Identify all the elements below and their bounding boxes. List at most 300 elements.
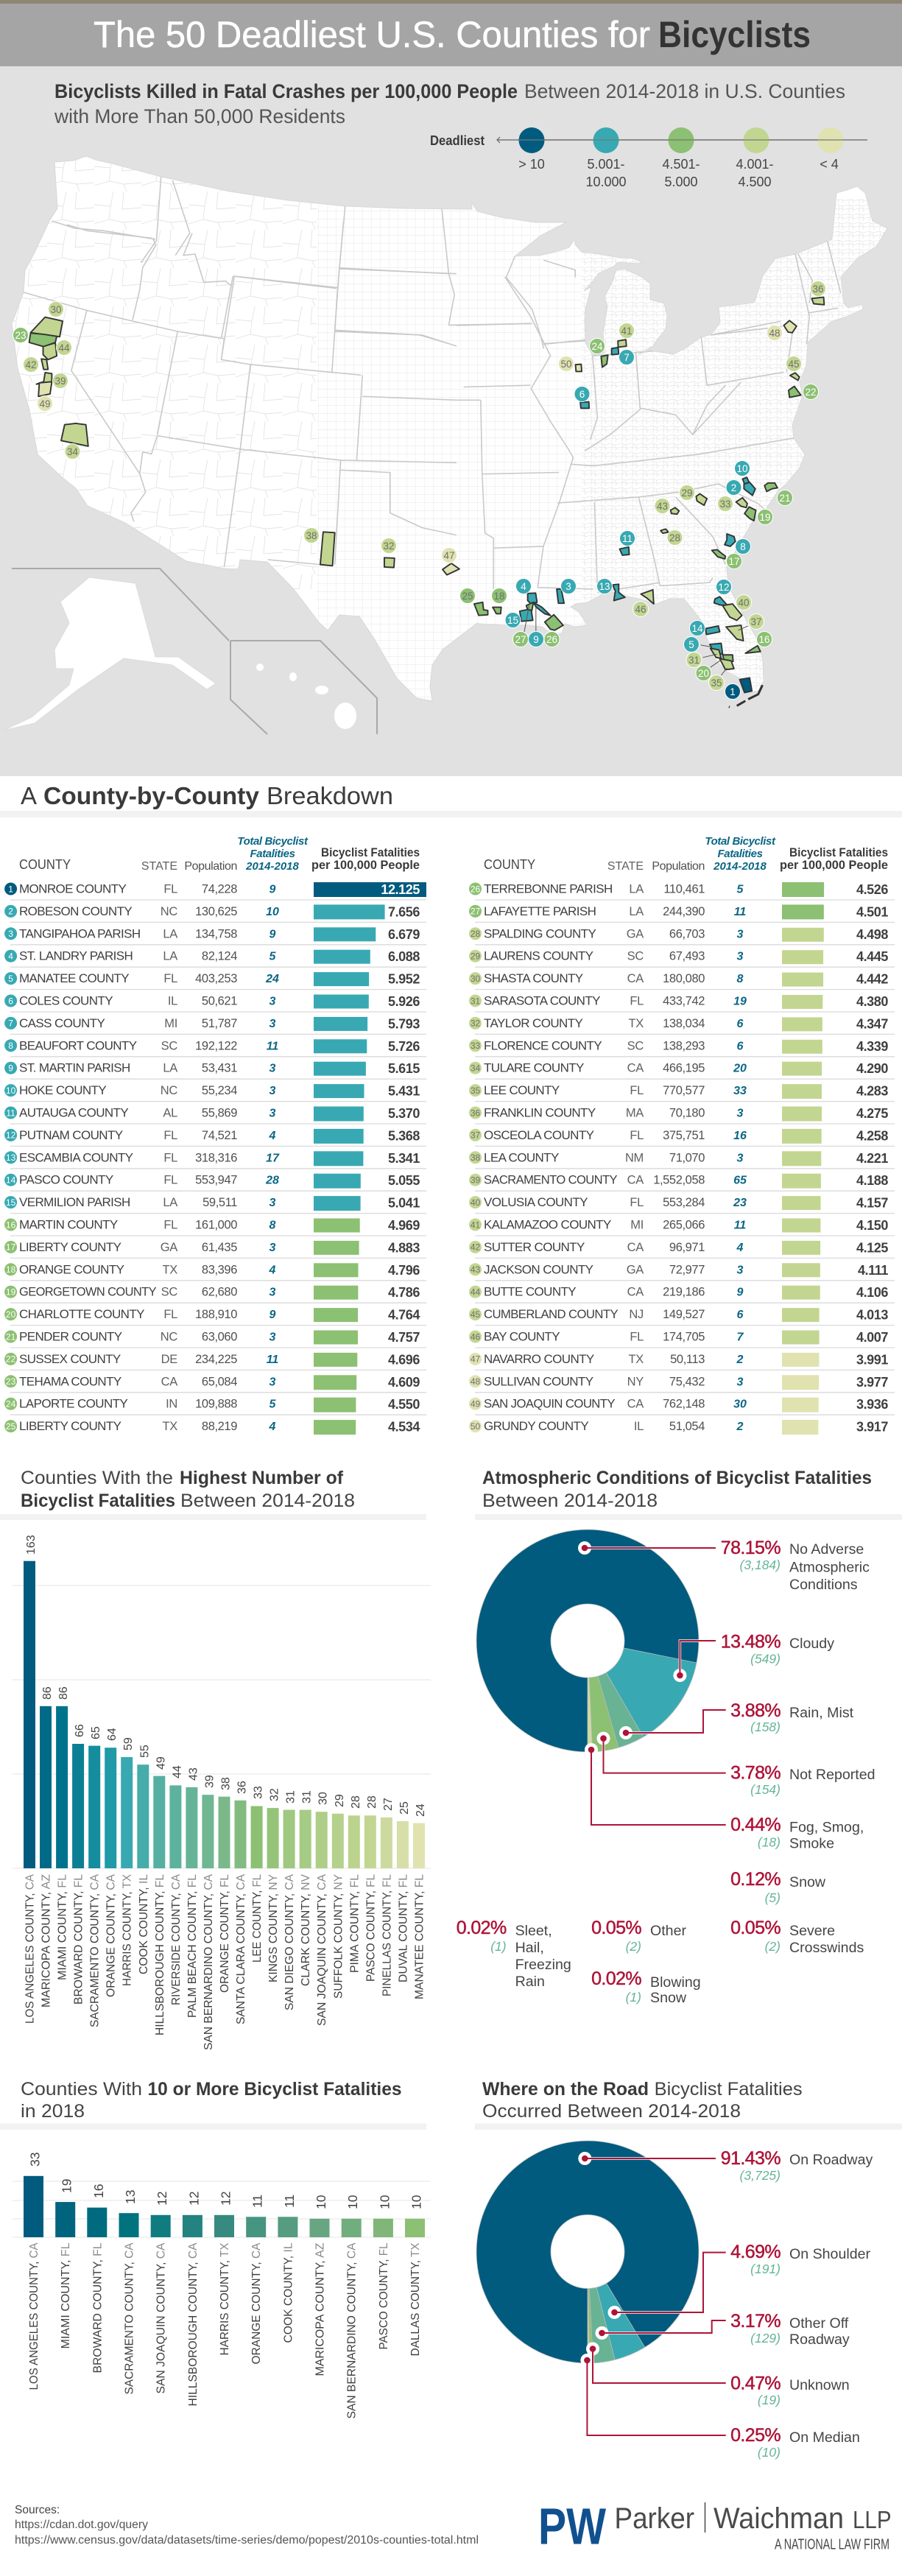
row 24: LAPORTE COUNTY [19,1397,127,1411]
labels: atmospheric conditions: (1) [490,1939,507,1954]
row 42: SUTTER COUNTY [484,1240,585,1254]
row 13: 318,316 [195,1151,237,1164]
row 4: 5 [269,951,277,963]
row 17 [4,1240,426,1258]
row 6: IL [168,994,177,1007]
row 42: 4 [736,1242,744,1254]
row 28: GA [627,927,644,940]
table header right: Total Bicyclist [705,835,776,848]
row 35: FL [630,1084,644,1097]
heading: where on the road: Occurred Between 2014-2018 [482,2101,741,2122]
row 11: 55,869 [202,1106,237,1119]
row 16: 4.969 [388,1218,420,1233]
map legend: 4.001- [736,157,774,172]
labels: atmospheric conditions: (5) [765,1890,781,1905]
map marker numbers: 30 [50,304,62,315]
row 34: CA [627,1062,644,1075]
row 33: 138,293 [663,1039,705,1052]
heading: where on the road: Where on the Road [482,2079,649,2100]
row 8: 192,122 [195,1039,237,1052]
row 7: 3 [269,1018,276,1030]
row 47: 50,113 [670,1353,705,1366]
heading: 10 or more fatalities: Counties With [21,2079,142,2100]
heading: highest number: Between 2014-2018 [180,1491,355,1511]
bar values: 38 [219,1777,233,1790]
row 15: 3 [269,1197,276,1209]
row 47: 2 [736,1354,744,1366]
row 24: 5 [269,1398,277,1411]
row 17: 4.883 [388,1240,420,1255]
row 41: 4.150 [856,1218,888,1233]
row 33: FLORENCE COUNTY [484,1038,602,1052]
row 45: 6 [737,1309,744,1321]
bar labels: SAN BERNARDINO COUNTY, CA [202,1874,215,2050]
row 16: 161,000 [195,1218,237,1231]
labels: atmospheric conditions: Fog, Smog, [789,1820,864,1836]
row 2: 7.656 [388,904,420,919]
row 15: VERMILION PARISH [19,1195,130,1209]
heading: 10 or more fatalities: 10 or More Bicyclist Fatalities [147,2079,402,2100]
row 6 [4,994,426,1012]
row 18 [4,1262,426,1281]
labels: atmospheric conditions: Other [650,1923,686,1939]
labels: where on the road: (129) [750,2331,781,2346]
row 41: MI [630,1218,644,1231]
bar values: 32 [269,1788,281,1801]
bar values 2018: 11 [282,2195,297,2208]
table header right [484,835,888,873]
bar labels: BROWARD COUNTY, FL [73,1874,85,2005]
panel: highest number of fatalities [0,1468,431,2050]
row 23: TEHAMA COUNTY [19,1374,121,1388]
map marker numbers: 37 [750,616,762,627]
row 40: FL [630,1196,644,1209]
row 20: FL [163,1308,177,1321]
table header right: COUNTY [484,857,535,872]
row 28: 66,703 [669,927,705,940]
row 50: GRUNDY COUNTY [484,1419,588,1433]
row 14: PASCO COUNTY [19,1173,113,1187]
row 48 [469,1374,895,1393]
map marker numbers: 22 [805,387,817,398]
row 3: 134,758 [195,927,237,940]
row 47: TX [629,1353,644,1366]
row 2: NC [161,905,177,918]
labels: atmospheric conditions [457,1538,875,2006]
row 44: 219,186 [663,1286,705,1299]
sources: Sources: [15,2504,60,2516]
map marker numbers: 8 [740,541,746,552]
table header left: Bicyclist Fatalities [321,845,420,859]
header band [0,0,902,66]
row 6: COLES COUNTY [19,994,113,1007]
row 37: 37 [471,1130,480,1141]
row 17: 17 [6,1242,16,1253]
map marker numbers: 38 [306,530,317,541]
row 5 [4,971,426,990]
row 13: 5.341 [388,1151,420,1166]
row 17: GA [161,1241,177,1254]
row 45: 45 [471,1309,480,1320]
row 35 [469,1083,895,1102]
bar labels 2018: BROWARD COUNTY, FL [91,2242,104,2373]
row 30: SHASTA COUNTY [484,971,583,985]
row 22: 11 [267,1354,278,1366]
row 15: 15 [6,1197,16,1208]
labels: where on the road: On Median [789,2429,860,2446]
map legend: 4.500 [738,175,772,189]
table header left: Population [184,860,237,873]
row 1: 12.125 [381,882,420,897]
map marker numbers: 46 [635,604,646,615]
row 40: 40 [471,1197,480,1208]
map marker numbers: 29 [681,488,693,499]
row 6: 5.926 [388,994,420,1009]
row 6: 6 [8,996,13,1006]
row 8: 5.726 [388,1039,420,1054]
row 10: 55,234 [202,1084,237,1097]
row 26: 4.526 [856,882,888,897]
row 49: 30 [733,1398,747,1411]
bar labels: LOS ANGELES COUNTY, CA [24,1874,37,2024]
callout leaders: atmospheric [578,1541,726,1825]
map markers 1-50 [13,281,826,700]
row 32: TX [629,1017,644,1030]
row 15 [4,1195,426,1214]
row 5: FL [163,972,177,985]
row 23: 4.609 [388,1375,420,1390]
map subtitle: Bicyclists Killed in Fatal Crashes per 100,000 People [54,80,518,102]
bar labels: MARICOPA COUNTY, AZ [40,1874,53,2007]
map marker numbers: 35 [711,678,722,689]
map marker numbers: 36 [812,284,824,295]
bar labels: CLARK COUNTY, NV [300,1874,312,1986]
labels: where on the road: (10) [758,2445,781,2460]
row 7: 7 [8,1018,13,1029]
map marker numbers: 31 [688,655,700,666]
map marker numbers: 50 [560,359,572,370]
labels: where on the road: 4.69% [730,2242,781,2262]
bar values: 24 [415,1803,427,1817]
bar labels 2018: SAN JOAQUIN COUNTY, CA [155,2242,168,2393]
row 31: 433,742 [663,994,705,1007]
row 18: ORANGE COUNTY [19,1262,124,1276]
row 43: GA [627,1263,644,1276]
row 46: 4.007 [856,1330,888,1345]
row 7: CASS COUNTY [19,1016,105,1030]
row 21: 4.757 [388,1330,420,1345]
bar labels: ORANGE COUNTY, FL [219,1874,231,1993]
map of United States counties [0,147,902,734]
row 5: 403,253 [195,972,237,985]
bar labels: SACRAMENTO COUNTY, CA [89,1874,102,2027]
map legend: > 10 [518,157,545,172]
row 18: 18 [6,1264,16,1275]
map marker numbers: 2 [731,482,736,493]
bar chart: 2018 fatalities [24,2176,425,2237]
table header left [19,835,420,873]
sources: https://www.census.gov/data/datasets/time-series/demo/popest/2010s-counties-total.html [15,2534,479,2547]
bar labels [24,1874,426,2050]
row 25: 25 [6,1421,16,1432]
bar values 2018: 16 [91,2184,106,2198]
row 33: 33 [471,1041,480,1051]
labels: atmospheric conditions: No Adverse [789,1541,864,1558]
bar values: 25 [398,1801,411,1815]
row 3: 9 [269,928,276,940]
row 45: 4.013 [856,1308,888,1323]
row 24 [4,1397,426,1415]
labels: atmospheric conditions: Snow [650,1990,687,2006]
row 47: 47 [471,1354,480,1365]
row 31: 31 [471,996,480,1006]
row 29: LAURENS COUNTY [484,949,593,963]
row 34: TULARE COUNTY [484,1061,584,1075]
bar values: 28 [366,1795,378,1809]
row 43: 4.111 [858,1263,888,1278]
bar chart: fatalities 2014-2018 [24,1561,425,1868]
row 36: FRANKLIN COUNTY [484,1106,596,1119]
row 20: 9 [269,1309,276,1321]
row 27: LA [629,905,644,918]
sources: https://cdan.dot.gov/query [15,2519,148,2531]
row 23: CA [161,1375,177,1388]
row 24: 109,888 [195,1398,237,1411]
bar values: 31 [301,1790,314,1803]
row 46: 7 [737,1331,744,1343]
row 7: MI [164,1017,177,1030]
labels: where on the road: (191) [750,2262,781,2276]
row 9: LA [163,1062,177,1075]
row 9: ST. MARTIN PARISH [19,1061,130,1075]
labels: atmospheric conditions: 3.88% [730,1700,781,1721]
row 50: 3.917 [856,1420,888,1435]
logo: Parker Waichman LLP: Waichman [714,2502,844,2535]
bar values 2018: 10 [377,2195,392,2209]
row 11 [4,1106,426,1124]
callout leaders: road position [578,2152,726,2435]
row 19: SC [161,1286,177,1299]
labels: where on the road: Other Off [789,2315,849,2332]
row 10: HOKE COUNTY [19,1083,106,1097]
map marker numbers: 14 [691,623,703,634]
map marker numbers: 12 [718,582,730,593]
row 31: FL [630,994,644,1007]
map legend [430,127,867,189]
row 3: LA [163,927,177,940]
row 3: TANGIPAHOA PARISH [19,926,141,940]
labels: atmospheric conditions: (3,184) [740,1558,781,1572]
row 21: NC [161,1330,177,1343]
row 38: 71,070 [669,1151,705,1164]
labels: where on the road: 0.25% [730,2425,781,2446]
row 42: CA [627,1241,644,1254]
map marker numbers [15,284,824,697]
row 30: 180,080 [663,972,705,985]
map marker numbers: 27 [515,634,526,645]
map subtitle: Between 2014-2018 in U.S. Counties [524,80,845,102]
map marker numbers: 15 [507,615,518,626]
bar values: 30 [317,1792,330,1805]
row 25: 4.534 [388,1420,420,1435]
row 46: FL [630,1330,644,1343]
bar labels 2018: SACRAMENTO COUNTY, CA [124,2242,135,2395]
row 38: 4.221 [856,1151,888,1166]
row 42: 96,971 [669,1241,705,1254]
row 2: 2 [8,907,13,917]
row 14: FL [163,1174,177,1187]
row 38 [469,1150,895,1169]
bar labels: SUFFOLK COUNTY, NY [332,1874,345,1999]
row 37: OSCEOLA COUNTY [484,1128,594,1142]
row 10: 10 [6,1085,16,1096]
heading: highest number: Bicyclist Fatalities [21,1491,175,1511]
panel: 10 or more fatalities in 2018 [0,2079,431,2418]
row 32: 32 [471,1018,480,1029]
heading: highest number: Counties With the [21,1468,173,1488]
logo: Parker Waichman LLP [538,2498,891,2555]
bar values 2018: 19 [60,2179,74,2193]
map marker numbers: 7 [624,352,630,363]
labels: atmospheric conditions: 0.12% [730,1869,781,1890]
map marker numbers: 43 [657,501,668,512]
row 28: 3 [737,928,744,940]
bar labels: ORANGE COUNTY, CA [105,1874,118,1997]
row 25 [4,1419,420,1435]
row 43: JACKSON COUNTY [484,1262,593,1276]
row 33: 4.339 [856,1039,888,1054]
heading: atmospheric conditions [482,1468,872,1511]
labels: atmospheric conditions: (158) [750,1720,781,1734]
row 35: 33 [733,1085,747,1097]
bar labels: SAN DIEGO COUNTY, CA [283,1874,296,2010]
row 29: 3 [737,951,744,963]
row 45 [469,1307,895,1326]
row 35: 4.283 [856,1084,888,1099]
labels: where on the road: Unknown [789,2377,850,2393]
row 48: NY [627,1375,644,1388]
table header left: 2014-2018 [245,860,300,873]
heading: where on the road [482,2079,803,2122]
row 8: 8 [8,1041,13,1051]
row 30: CA [627,972,644,985]
row 40: VOLUSIA COUNTY [484,1195,588,1209]
bar values 2018: 10 [345,2195,360,2209]
row 14 [4,1173,426,1191]
row 12: 5.368 [388,1128,420,1143]
map marker numbers: 3 [565,581,571,592]
row 42: 4.125 [856,1240,888,1255]
table header left: STATE [141,860,177,873]
row 36: 36 [471,1108,480,1118]
row 31: SARASOTA COUNTY [484,994,600,1007]
bar labels: SAN JOAQUIN COUNTY, CA [316,1874,328,2026]
row 43: 3 [737,1264,744,1276]
row 36: 70,180 [669,1106,705,1119]
row 49: SAN JOAQUIN COUNTY [484,1397,615,1411]
row 26: 5 [737,884,744,895]
row 28: 4.498 [856,927,888,942]
row 36: MA [626,1106,644,1119]
map marker numbers: 40 [738,597,750,608]
row 47 [469,1352,895,1370]
row 48: 48 [471,1376,480,1387]
row 9 [4,1061,426,1079]
map marker numbers: 18 [493,591,505,602]
heading: county-by-county breakdown: County-by-County [43,782,260,809]
labels: atmospheric conditions: 0.02% [457,1918,507,1938]
table header right: per 100,000 People [780,858,888,872]
labels: atmospheric conditions: 0.05% [730,1918,781,1938]
row 31: 19 [733,996,747,1007]
row 23 [4,1374,426,1393]
row 32: 138,034 [663,1017,705,1030]
heading: atmospheric conditions: Between 2014-2018 [482,1491,658,1511]
bar values: 59 [122,1737,135,1750]
map marker numbers: 45 [788,359,800,370]
row 49: 762,148 [663,1398,705,1411]
row 28 [469,926,895,945]
labels: atmospheric conditions: 3.78% [730,1763,781,1784]
map legend: 5.000 [664,175,698,189]
row 26 [469,882,895,900]
row 50: 51,054 [669,1420,705,1433]
row 50: IL [634,1420,644,1433]
row 39 [469,1173,895,1191]
row 44 [469,1285,895,1303]
row 26: 26 [471,884,480,894]
map marker numbers: 33 [719,499,731,510]
row 22: DE [161,1353,177,1366]
panel: where on the road [475,2079,902,2460]
heading: atmospheric conditions: Atmospheric Conditions of Bicyclist Fatalities [482,1468,872,1488]
logo: Parker Waichman LLP: LLP [853,2506,891,2533]
row 20: CHARLOTTE COUNTY [19,1307,144,1321]
row 15: 59,511 [202,1196,237,1209]
row 22: SUSSEX COUNTY [19,1352,121,1366]
map marker numbers: 34 [67,446,78,457]
map legend: 10.000 [585,175,627,189]
row 19: 62,680 [202,1286,237,1299]
row 28: 28 [471,929,480,939]
row 34: 4.290 [856,1061,888,1076]
labels: atmospheric conditions: Conditions [789,1577,858,1593]
labels: atmospheric conditions: Atmospheric [789,1560,870,1576]
row 27: 11 [734,906,746,918]
row 11: 3 [269,1108,276,1119]
row 31: 4.380 [856,994,888,1009]
labels: atmospheric conditions: 78.15% [721,1538,781,1558]
row 17: 3 [269,1242,276,1254]
map marker numbers: 24 [591,341,603,352]
row 36 [469,1106,895,1124]
bar values: 33 [253,1786,265,1799]
row 5: 5.952 [388,972,420,987]
row 11: 11 [6,1108,15,1118]
row 27: 27 [471,907,480,917]
row 2: 10 [266,906,279,918]
labels: atmospheric conditions: Not Reported [789,1767,875,1783]
row 25: TX [163,1420,177,1433]
row 44: CA [627,1286,644,1299]
row 40: 553,284 [663,1196,705,1209]
heading: county-by-county breakdown: A [21,782,37,809]
row 34 [469,1061,895,1079]
row 49 [469,1397,895,1415]
map marker numbers: 11 [622,533,633,544]
row 15: LA [163,1196,177,1209]
bar values 2018 [28,2153,424,2209]
